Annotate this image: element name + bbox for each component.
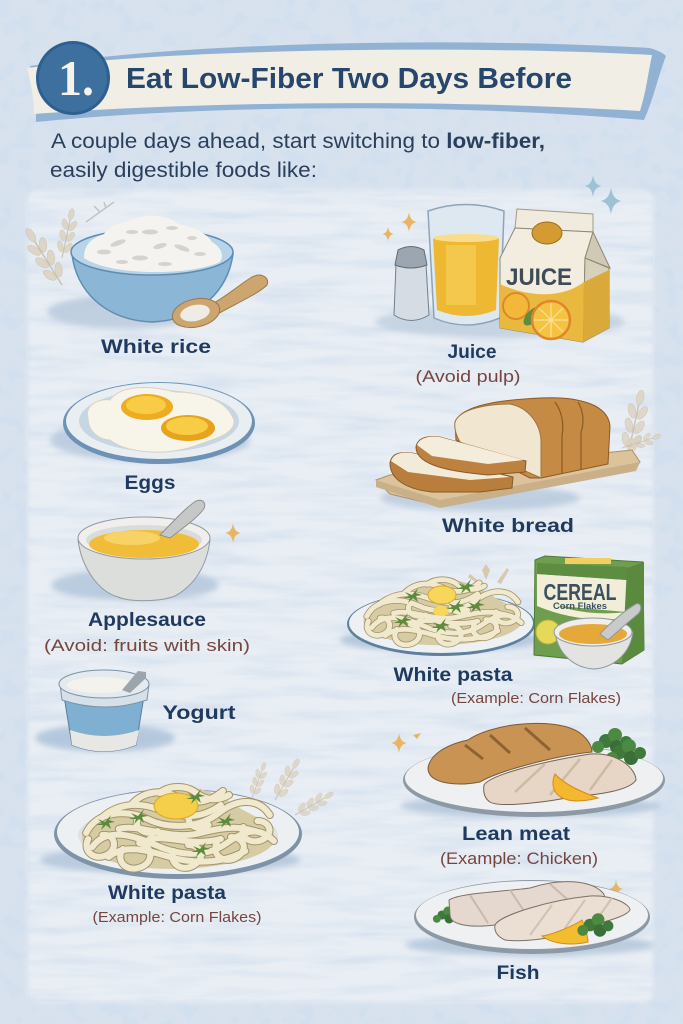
item: white pasta right + cereal — [340, 556, 644, 707]
label: Applesauce — [88, 609, 206, 631]
cereal box: CEREAL — [544, 579, 616, 605]
label: White pasta — [108, 882, 226, 904]
cereal box: Corn Flakes — [553, 601, 607, 611]
badge number — [36, 41, 110, 115]
item: white pasta left — [40, 755, 337, 926]
item: lean meat — [391, 723, 665, 868]
intro text — [50, 129, 545, 182]
badge number: 1. — [58, 50, 94, 106]
cereal box — [534, 556, 644, 664]
note: (Example: Corn Flakes) — [451, 690, 621, 707]
board — [376, 450, 640, 506]
item: yogurt — [35, 670, 236, 752]
item: fish — [405, 880, 655, 984]
chicken white — [484, 754, 636, 804]
title: Eat Low-Fiber Two Days Before — [126, 63, 572, 95]
intro text: A couple days ahead, start switching to low-fiber, — [51, 129, 545, 153]
note: (Example: Corn Flakes) — [92, 909, 262, 926]
item: white rice — [17, 202, 268, 358]
label: Lean meat — [462, 823, 571, 845]
label: Yogurt — [162, 702, 236, 724]
intro text: easily digestible foods like: — [50, 158, 317, 182]
cereal bowl — [554, 604, 641, 669]
label: Eggs — [124, 472, 176, 494]
label: White pasta — [394, 664, 513, 686]
salt shaker — [394, 246, 429, 320]
slices — [390, 453, 513, 492]
glass — [428, 204, 504, 325]
lemon — [553, 774, 598, 801]
parsley — [592, 728, 632, 754]
title banner — [27, 41, 666, 122]
item: white bread — [376, 388, 663, 537]
label: White bread — [442, 515, 574, 537]
spoon — [208, 275, 268, 316]
item: juice — [375, 175, 625, 386]
item: eggs — [50, 382, 255, 494]
label: Juice — [448, 341, 497, 363]
note: (Avoid pulp) — [416, 368, 520, 386]
item: applesauce — [44, 500, 250, 655]
label: White rice — [101, 336, 211, 358]
carton: JUICE — [506, 264, 572, 291]
label: Fish — [496, 962, 540, 984]
carton — [500, 209, 610, 342]
chicken brown — [428, 723, 592, 784]
note: (Avoid: fruits with skin) — [44, 637, 250, 655]
note: (Example: Chicken) — [440, 850, 598, 868]
loaf — [455, 398, 610, 478]
